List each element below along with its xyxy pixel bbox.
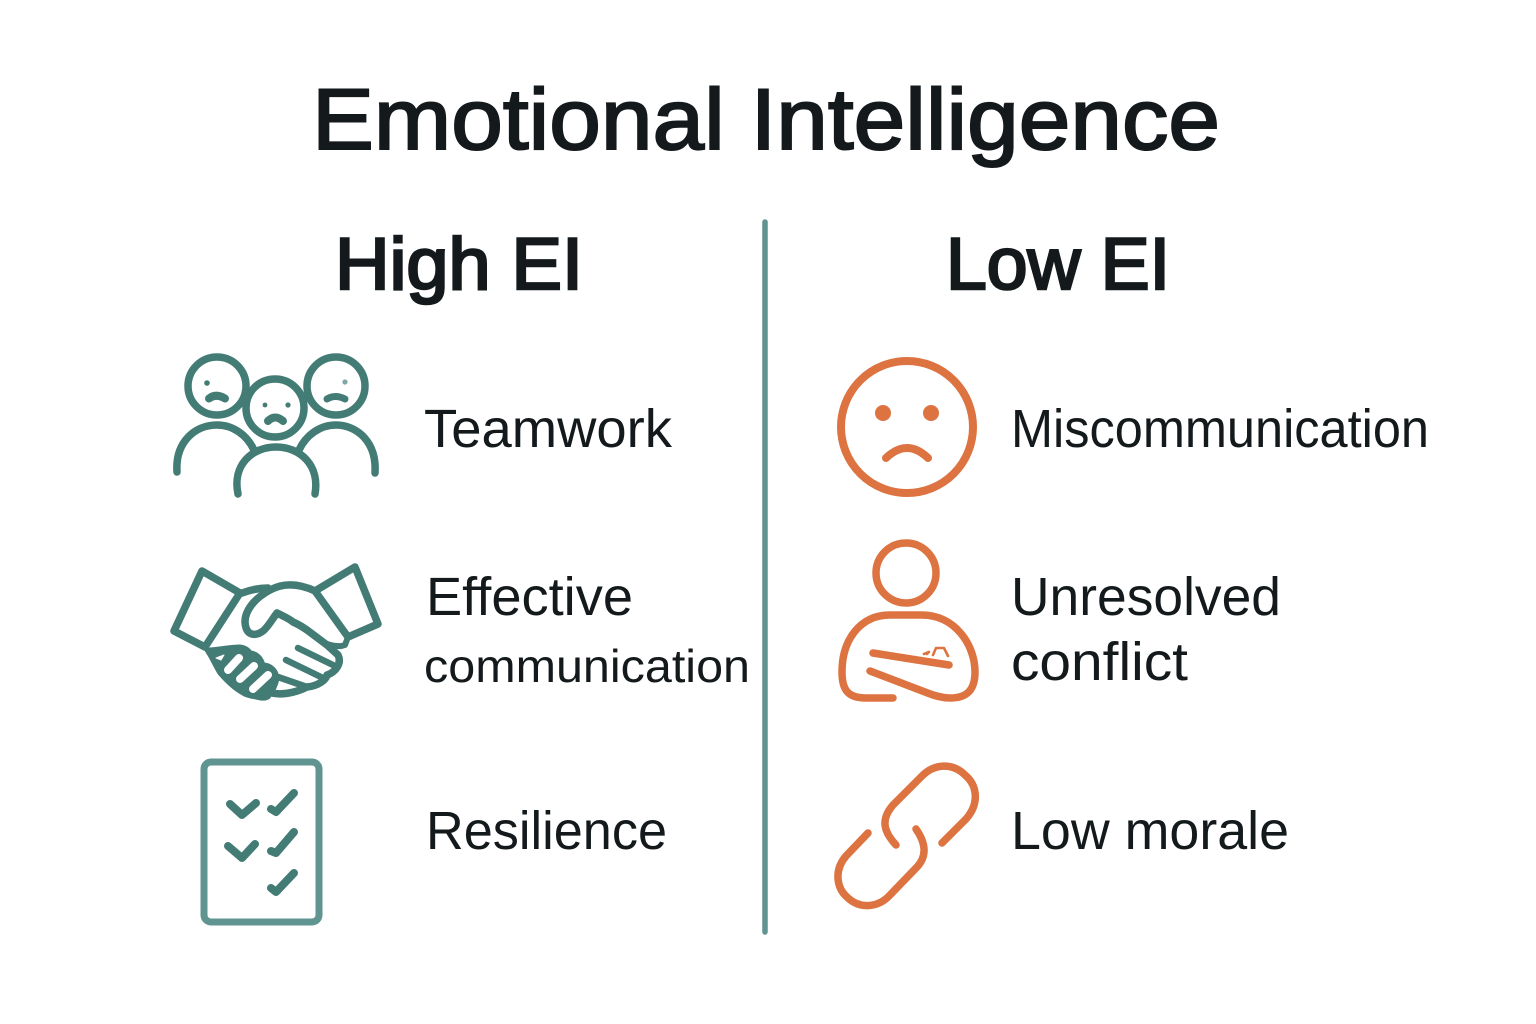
center divider	[762, 222, 768, 932]
label: Unresolved conflict: conflict	[1011, 632, 1188, 692]
label: Unresolved conflict: Unresolved	[1011, 567, 1281, 627]
label: Effective communication: Effective	[426, 567, 633, 627]
icon: person with crossed arms	[842, 543, 975, 698]
label: Unresolved conflict	[1011, 567, 1281, 692]
label: Low morale: Low morale	[1011, 801, 1289, 861]
heading: High EI: High EI	[335, 224, 583, 305]
title: Emotional Intelligence	[312, 72, 1220, 168]
heading: Low EI: Low EI	[946, 224, 1170, 305]
icon: team of three people	[177, 357, 375, 494]
label: Teamwork: Teamwork	[424, 399, 673, 459]
label: Effective communication	[424, 567, 750, 692]
label: Effective communication: communication	[424, 640, 750, 692]
icon: sad face	[841, 361, 973, 493]
label: Resilience: Resilience	[426, 801, 667, 861]
icon: broken chain link	[838, 766, 975, 906]
icon: handshake	[174, 567, 378, 698]
label: Miscommunication: Miscommunication	[1011, 399, 1429, 459]
icon: checklist	[204, 762, 319, 922]
